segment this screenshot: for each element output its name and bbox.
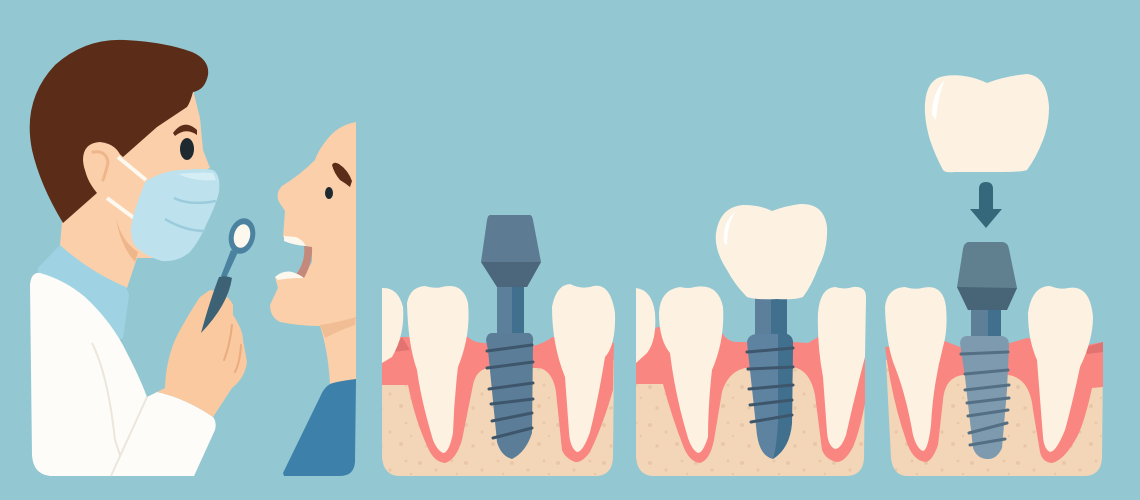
bone — [886, 360, 1103, 476]
patient eye — [325, 187, 333, 199]
bone — [382, 360, 614, 476]
dentist shirt collar — [36, 245, 129, 340]
dentist ear — [83, 142, 122, 190]
patient figure — [270, 122, 356, 476]
dentist hair — [30, 40, 208, 223]
right tooth — [818, 287, 866, 449]
dental crown — [925, 74, 1049, 172]
dentist eyebrow — [173, 125, 197, 136]
panel: crown fitted on implant — [636, 204, 866, 476]
patient chin crease — [320, 317, 356, 338]
mask straps — [107, 157, 146, 218]
implant screw — [957, 242, 1017, 459]
panel: implant post in jaw — [382, 215, 615, 476]
right tooth — [1028, 286, 1093, 452]
dental mirror — [201, 215, 259, 333]
dentist jaw shadow — [116, 218, 138, 262]
gum shadow — [392, 337, 410, 352]
arrow down — [970, 182, 1002, 228]
implant screw — [481, 215, 541, 459]
dentist neck and face — [60, 90, 210, 288]
right tooth — [552, 284, 615, 452]
bone — [636, 360, 865, 476]
gum — [636, 327, 865, 463]
dentist hand — [157, 290, 247, 417]
surgical mask — [131, 169, 219, 261]
dental crown — [716, 204, 827, 299]
implant screw — [747, 295, 793, 459]
gum — [885, 338, 1103, 463]
dentist eye — [180, 138, 194, 160]
white coat — [30, 273, 216, 476]
left tooth — [382, 288, 403, 363]
patient open mouth — [275, 236, 312, 280]
left tooth — [636, 288, 655, 363]
panel: crown descending onto abutment — [885, 74, 1103, 476]
dentist figure — [30, 40, 259, 476]
second tooth — [659, 286, 723, 453]
second tooth — [407, 286, 469, 453]
patient eyebrow — [332, 163, 352, 187]
gum shadow — [1086, 342, 1103, 354]
patient head and neck — [270, 122, 356, 384]
left tooth — [885, 287, 947, 451]
gum — [382, 337, 614, 463]
patient shirt — [283, 379, 356, 476]
